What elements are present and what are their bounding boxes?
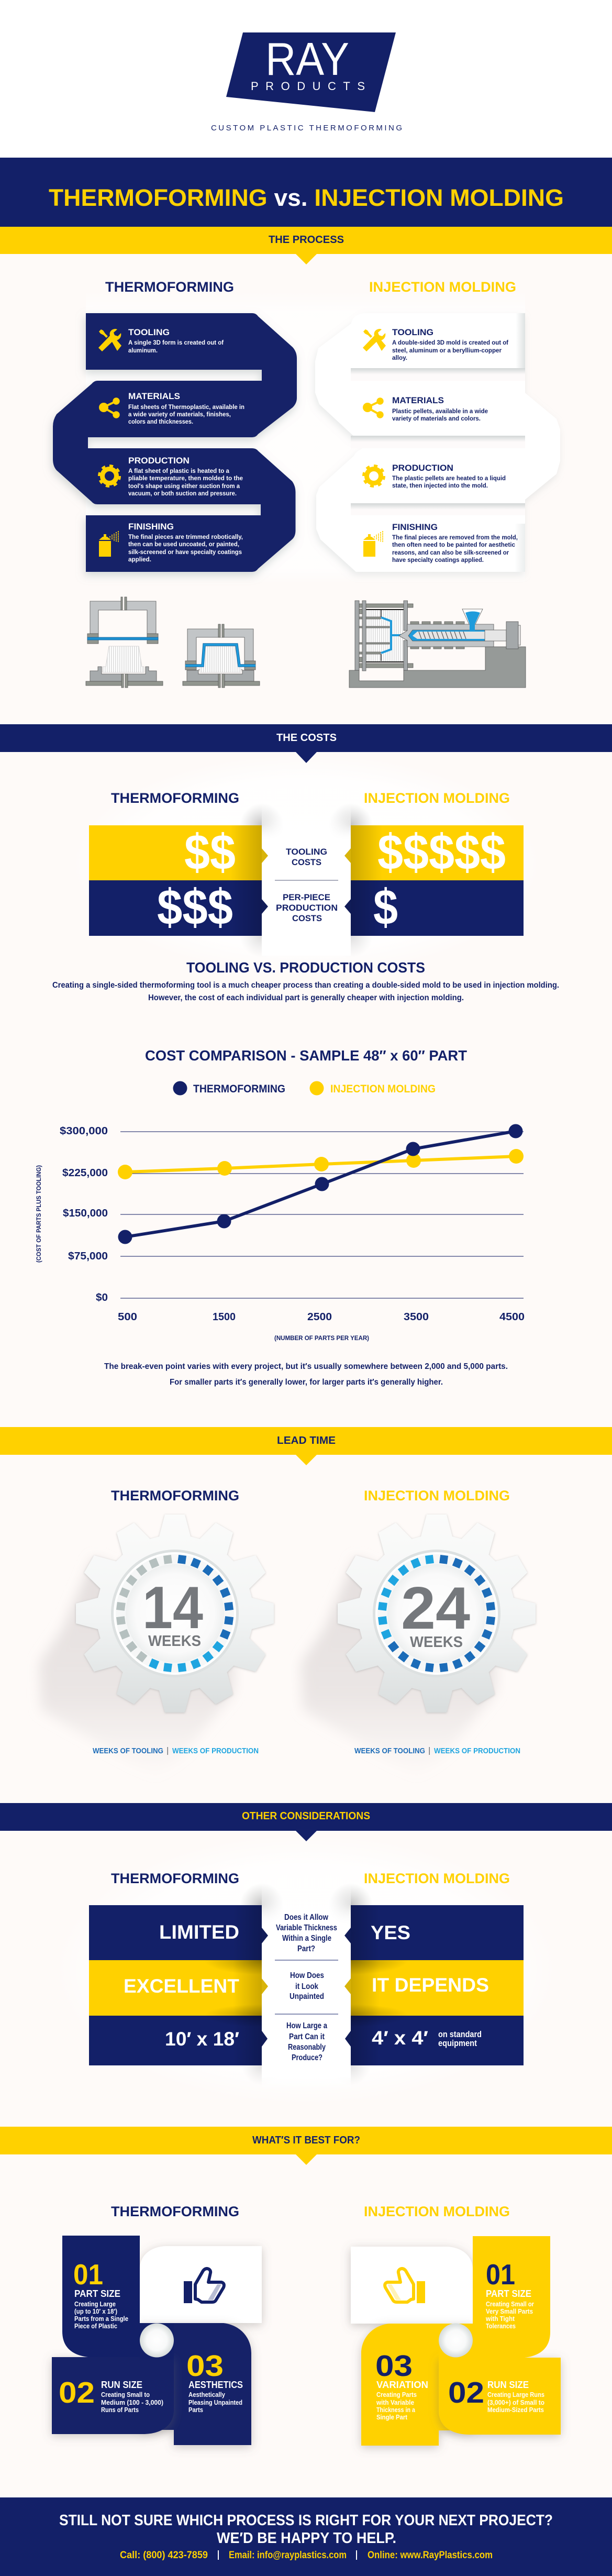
row label: per-piece production costs: PER-PIECE	[283, 893, 330, 902]
text block: break-even note	[104, 1362, 508, 1387]
question: variable thickness: Part?	[297, 1944, 315, 1953]
question: variable thickness: Does it Allow	[284, 1913, 329, 1922]
heading: cost comparison chart: COST COMPARISON - SAMPLE 48″ x 60″ PART	[145, 1047, 467, 1064]
step: production: PRODUCTION	[392, 463, 453, 473]
x axis labels: 2500	[307, 1311, 332, 1323]
row label: tooling costs: TOOLING	[286, 847, 327, 857]
answer: 4 x 4 on standard equipment	[372, 2027, 482, 2049]
panel: cost comparison table	[89, 801, 524, 958]
step: materials: colors and thicknesses.	[128, 419, 193, 425]
injection molding tooling cost: $$$$$	[377, 824, 506, 880]
step: finishing: The final pieces are removed from the mold,	[392, 535, 518, 541]
gear: thermoforming 14 weeks: WEEKS	[148, 1633, 201, 1650]
step: finishing: then often need to be painted for aesthetic	[392, 542, 516, 548]
chart legend: THERMOFORMING	[193, 1083, 285, 1095]
row label: tooling costs	[286, 847, 327, 867]
item 02: run size: RUN SIZE	[487, 2380, 529, 2390]
item 01: part size: Very Small Parts	[486, 2308, 533, 2315]
text block: cost explanation: However, the cost of each individual part is generally cheaper with injection molding.	[148, 993, 464, 1002]
step: materials	[392, 396, 488, 422]
item 03: variation: Single Part	[376, 2414, 408, 2421]
diagram: thermoforming tool closed	[183, 624, 260, 688]
step: materials: Plastic pellets, available in a wide	[392, 408, 488, 415]
icon: wrench and screwdriver	[98, 329, 121, 351]
heading: injection molding costs: INJECTION MOLDING	[364, 790, 510, 806]
item 02: run size: Runs of Parts	[101, 2406, 139, 2414]
icon: thumbs up	[385, 2269, 425, 2303]
y axis labels: $75,000	[68, 1251, 108, 1262]
item 03: variation: with Variable	[376, 2399, 414, 2406]
section band: what's it best for: WHAT′S IT BEST FOR?	[252, 2134, 360, 2146]
panel: thermoforming process chain	[53, 313, 297, 572]
step: finishing	[128, 522, 243, 563]
item 02: run size: (3,000+) of Small to	[487, 2399, 544, 2406]
heading: tooling vs production costs: TOOLING VS. PRODUCTION COSTS	[186, 959, 425, 976]
heading: thermoforming lead time: THERMOFORMING	[111, 1488, 239, 1503]
x axis labels: 1500	[213, 1311, 236, 1323]
section band: the process: THE PROCESS	[269, 234, 344, 246]
footer call to action: WE′D BE HAPPY TO HELP.	[217, 2530, 396, 2547]
section band: lead time: LEAD TIME	[277, 1434, 336, 1446]
y axis labels: $150,000	[63, 1208, 108, 1219]
item 01: part size: PART SIZE	[486, 2288, 531, 2299]
step: finishing: FINISHING	[128, 522, 174, 532]
step: finishing: silk-screened or have specialty coatings	[128, 549, 242, 556]
thermoforming tooling cost: $$	[184, 824, 236, 880]
row label: per-piece production costs: PRODUCTION	[276, 903, 338, 913]
question: largest part: Produce?	[292, 2053, 322, 2062]
item 03: variation: 03	[375, 2349, 413, 2383]
item 02: run size: 02	[59, 2376, 95, 2409]
footer call to action	[0, 2497, 612, 2576]
row label: tooling costs: COSTS	[292, 858, 321, 867]
chart legend	[173, 1081, 436, 1096]
thumbs up hole	[140, 2323, 174, 2358]
text block: cost explanation: Creating a single-sided thermoforming tool is a much cheaper process than creating a double-sided mold to be used in injection molding.	[52, 981, 559, 990]
item 01: part size: (up to 10′ x 18′)	[74, 2308, 117, 2315]
legend: thermoforming weeks	[93, 1747, 259, 1755]
item 03: variation: Creating Parts	[376, 2391, 417, 2398]
item 03: aesthetics: 03	[186, 2349, 224, 2383]
step: materials: MATERIALS	[128, 392, 180, 401]
step: finishing: have specialty coatings applied.	[392, 557, 484, 563]
item 03: variation: VARIATION	[376, 2380, 428, 2390]
heading: thermoforming best for: THERMOFORMING	[111, 2204, 239, 2219]
question: unpainted look: it Look	[295, 1982, 318, 1991]
question: variable thickness: Within a Single	[282, 1934, 331, 1943]
gear: injection molding 24 weeks: WEEKS	[410, 1634, 463, 1651]
item 03: aesthetics	[186, 2349, 243, 2414]
step: finishing	[392, 523, 518, 563]
item 01: part size: 01	[486, 2258, 515, 2291]
answer: 4 x 4 on standard equipment: equipment	[438, 2039, 477, 2048]
item 03: aesthetics: AESTHETICS	[188, 2380, 243, 2390]
answer: 10 x 18: 10′ x 18′	[165, 2028, 239, 2050]
section band: the costs: THE COSTS	[276, 732, 337, 744]
answer: it depends: IT DEPENDS	[372, 1974, 489, 1996]
panel: other considerations table	[89, 1880, 524, 2089]
step: tooling: A single 3D form is created out of	[128, 340, 224, 346]
item 02: run size: 02	[448, 2376, 484, 2409]
item 01: part size: Tolerances	[486, 2323, 516, 2330]
section band: lead time	[0, 1427, 612, 1465]
text block: break-even note: The break-even point varies with every project, but it′s usually somewhere between 2,000 and 5,000 parts.	[104, 1362, 508, 1371]
item 03: variation	[375, 2349, 428, 2421]
y axis labels	[60, 1125, 108, 1303]
heading: injection molding best for: INJECTION MOLDING	[364, 2204, 510, 2219]
item 03: variation: Thickness in a	[376, 2406, 416, 2414]
gear: thermoforming 14 weeks: 14	[142, 1575, 203, 1641]
diagram: injection molding machine	[349, 601, 526, 688]
icon: thumbs up	[184, 2269, 224, 2303]
y axis labels: $300,000	[60, 1125, 108, 1137]
question: variable thickness	[276, 1913, 337, 1953]
question: largest part: Part Can it	[289, 2032, 325, 2041]
y axis labels: $0	[96, 1292, 108, 1303]
legend: injection molding weeks: WEEKS OF TOOLING	[354, 1747, 425, 1755]
tagline: CUSTOM PLASTIC THERMOFORMING	[211, 124, 402, 132]
item 01: part size: PART SIZE	[74, 2288, 120, 2299]
step: tooling: A double-sided 3D mold is created out of	[392, 340, 508, 346]
item 02: run size: Creating Large Runs	[487, 2391, 544, 2398]
section band: the costs	[0, 724, 612, 763]
contact: email: Email: info@rayplastics.com	[229, 2550, 347, 2561]
question: unpainted look: Unpainted	[290, 1992, 324, 2001]
step: finishing: then can be used uncoated, or painted,	[128, 541, 239, 548]
step: tooling: alloy.	[392, 355, 407, 361]
icon: wrench and screwdriver	[363, 329, 386, 351]
icon: gear	[363, 466, 384, 486]
item 01: part size: Creating Large	[74, 2301, 116, 2308]
panel: thermoforming best uses	[52, 2236, 262, 2445]
thermoforming per-piece cost: $$$	[157, 879, 233, 935]
step: finishing: reasons, and can also be silk-screened or	[392, 550, 509, 556]
item 03: aesthetics: Aesthetically	[188, 2391, 225, 2398]
step: production: tool′s shape using either suction from a	[128, 483, 240, 490]
heading: injection molding lead time: INJECTION MOLDING	[364, 1488, 510, 1503]
step: tooling: TOOLING	[128, 328, 170, 337]
diagram: thermoforming tool open	[86, 597, 163, 688]
title banner: THERMOFORMING vs. INJECTION MOLDING	[49, 184, 564, 211]
item 03: aesthetics: Pleasing Unpainted	[188, 2399, 242, 2406]
text block: cost explanation	[52, 981, 559, 1002]
answer: 4 x 4 on standard equipment: on standard	[438, 2030, 482, 2039]
item 01: part size	[73, 2258, 128, 2330]
item 02: run size	[59, 2376, 163, 2414]
icon: spray can	[99, 531, 118, 557]
x axis title: (NUMBER OF PARTS PER YEAR)	[274, 1335, 369, 1342]
title banner	[0, 158, 612, 227]
gear: injection molding 24 weeks	[301, 1514, 536, 1777]
item 01: part size: Creating Small or	[486, 2301, 534, 2308]
x axis labels	[118, 1311, 525, 1323]
step: materials: a wide variety of materials, finishes,	[128, 412, 231, 418]
item 01: part size	[485, 2258, 534, 2330]
question: unpainted look	[290, 1971, 324, 2001]
panel: injection molding process chain	[315, 313, 560, 572]
item 02: run size: Medium-Sized Parts	[487, 2406, 544, 2414]
step: production: PRODUCTION	[128, 456, 190, 466]
step: production	[128, 456, 243, 497]
header logo: PRODUCTS	[251, 80, 365, 93]
step: production	[392, 463, 506, 489]
legend: injection molding weeks	[354, 1747, 520, 1755]
x axis labels: 4500	[499, 1311, 525, 1323]
icon: gear	[99, 466, 119, 486]
step: finishing: FINISHING	[392, 523, 438, 532]
panel: injection molding best uses	[351, 2236, 561, 2446]
contact: website: Online: www.RayPlastics.com	[368, 2550, 493, 2561]
heading: thermoforming process: THERMOFORMING	[105, 279, 234, 295]
header logo: RAY	[265, 33, 349, 85]
row label: per-piece production costs: COSTS	[292, 914, 322, 923]
series: injection molding	[118, 1149, 524, 1179]
step: production: pliable temperature, then molded to the	[128, 476, 243, 482]
footer call to action: STILL NOT SURE WHICH PROCESS IS RIGHT FOR YOUR NEXT PROJECT?	[59, 2512, 553, 2529]
item 01: part size: Piece of Plastic	[74, 2323, 117, 2330]
question: unpainted look: How Does	[290, 1971, 324, 1980]
heading: thermoforming considerations: THERMOFORMING	[111, 1871, 239, 1886]
row label: per-piece production costs	[276, 893, 338, 923]
icon: share nodes	[363, 397, 384, 418]
step: materials: MATERIALS	[392, 396, 444, 405]
step: production: state, then injected into the mold.	[392, 483, 488, 489]
item 01: part size: 01	[73, 2258, 103, 2291]
step: finishing: The final pieces are trimmed robotically,	[128, 534, 243, 540]
icon: spray can	[363, 531, 383, 557]
x axis labels: 500	[118, 1311, 137, 1323]
contact: phone: Call: (800) 423-7859	[120, 2550, 208, 2561]
item 01: part size: Parts from a Single	[74, 2315, 128, 2323]
section band: what's it best for	[0, 2127, 612, 2165]
answer: limited: LIMITED	[159, 1921, 239, 1943]
x axis labels: 3500	[404, 1311, 429, 1323]
series: thermoforming	[118, 1124, 522, 1244]
step: tooling	[128, 328, 224, 354]
icon: share nodes	[99, 397, 120, 418]
gear: injection molding 24 weeks: 24	[401, 1575, 470, 1642]
item 02: run size: Creating Small to	[101, 2391, 150, 2398]
y axis labels: $225,000	[62, 1167, 108, 1179]
section band: other considerations: OTHER CONSIDERATIONS	[242, 1810, 370, 1822]
step: tooling	[392, 328, 508, 361]
item 03: aesthetics: Parts	[188, 2406, 203, 2414]
injection molding per-piece cost: $	[373, 879, 398, 935]
item 01: part size: with Tight	[485, 2315, 515, 2323]
gear: thermoforming 14 weeks	[39, 1514, 274, 1777]
heading: thermoforming costs: THERMOFORMING	[111, 790, 239, 806]
item 02: run size: Medium (100 - 3,000)	[101, 2399, 163, 2406]
legend: thermoforming weeks: WEEKS OF PRODUCTION	[172, 1747, 259, 1755]
question: largest part	[286, 2021, 327, 2062]
step: tooling: TOOLING	[392, 328, 433, 337]
y axis title: (COST OF PARTS PLUS TOOLING)	[36, 1165, 42, 1263]
question: variable thickness: Variable Thickness	[276, 1923, 337, 1932]
step: materials: variety of materials and colors.	[392, 416, 481, 422]
text block: break-even note: For smaller parts it′s generally lower, for larger parts it′s generally higher.	[170, 1378, 443, 1387]
step: tooling: steel, aluminum or a beryllium-copper	[392, 348, 502, 354]
step: production: A flat sheet of plastic is heated to a	[128, 468, 230, 474]
item 02: run size	[448, 2376, 544, 2414]
chart legend: INJECTION MOLDING	[330, 1083, 436, 1095]
answer: 4 x 4 on standard equipment: 4′ x 4′	[372, 2027, 428, 2049]
section band: other considerations	[0, 1803, 612, 1841]
answer: excellent: EXCELLENT	[124, 1975, 239, 1997]
line chart: cost vs parts per year	[36, 1124, 525, 1342]
step: materials: Flat sheets of Thermoplastic, available in	[128, 404, 244, 411]
step: tooling: aluminum.	[128, 348, 158, 354]
step: production: vacuum, or both suction and pressure.	[128, 491, 237, 497]
legend: thermoforming weeks: WEEKS OF TOOLING	[93, 1747, 163, 1755]
section band: the process	[0, 227, 612, 264]
question: largest part: How Large a	[286, 2021, 327, 2030]
step: materials	[128, 392, 244, 425]
heading: injection molding considerations: INJECTION MOLDING	[364, 1871, 510, 1886]
step: production: The plastic pellets are heated to a liquid	[392, 476, 506, 482]
question: largest part: Reasonably	[288, 2043, 326, 2052]
answer: yes: YES	[371, 1922, 410, 1943]
legend: injection molding weeks: WEEKS OF PRODUCTION	[434, 1747, 520, 1755]
heading: injection molding process: INJECTION MOLDING	[369, 279, 516, 295]
step: finishing: applied.	[128, 557, 151, 563]
header logo	[226, 32, 396, 112]
item 02: run size: RUN SIZE	[101, 2380, 142, 2390]
